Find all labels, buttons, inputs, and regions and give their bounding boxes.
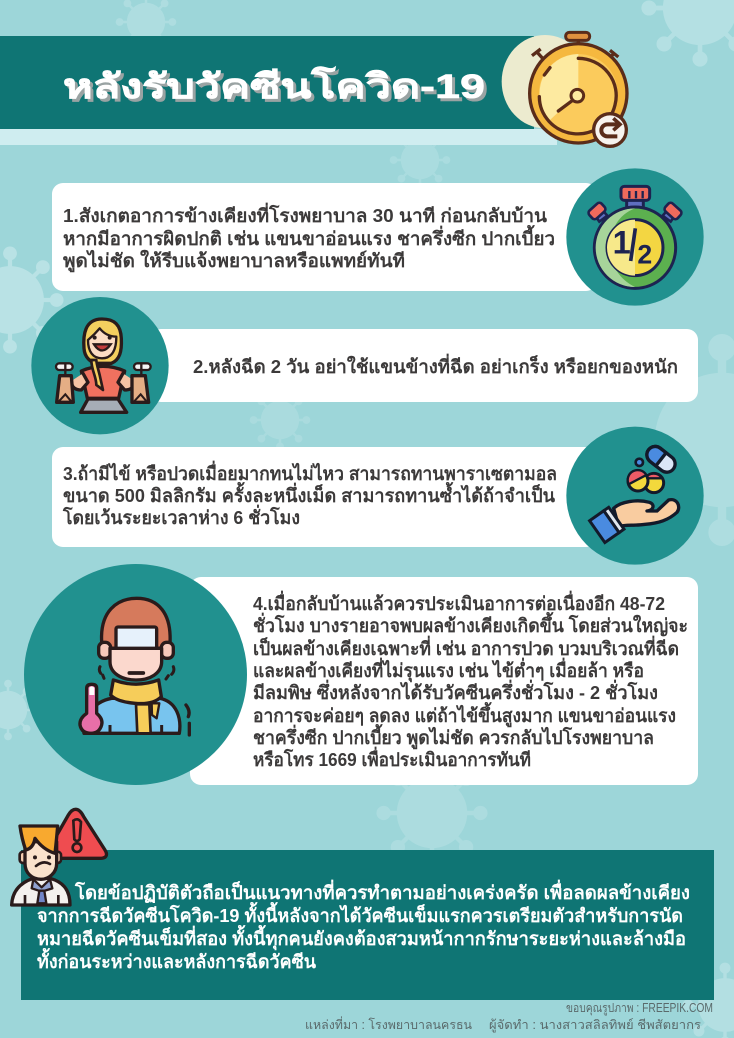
text: closing advice: จากการฉีดวัคซีนโควิด-19 ทั้งนี้หลังจากได้วัคซีนเข็มแรกควรเตรียมตัวสำหรับการนัด — [37, 902, 683, 926]
text: step 4: และผลข้างเคียงที่ไม่รุนแรง เช่น ไข้ต่ำๆ เมื่อยล้า หรือ — [253, 657, 644, 683]
text: step 1: พูดไม่ชัด ให้รีบแจ้งพยาบาลหรือแพทย์ทันที — [63, 249, 405, 273]
icon: feverish person — [24, 564, 247, 785]
icon: warning triangle and worried doctor — [12, 809, 107, 905]
text: closing advice: โดยข้อปฏิบัติตัวถือเป็นแนวทางที่ควรทำตามอย่างเคร่งครัด เพื่อลดผลข้างเคียง — [74, 879, 690, 904]
text: step 4: ชั่วโมง บางรายอาจพบผลข้างเคียงเกิดขึ้น โดยส่วนใหญ่จะ — [253, 612, 688, 637]
panel: closing advice — [21, 850, 714, 1000]
text: one half: 1 — [613, 223, 631, 260]
text: closing advice: หมายฉีดวัคซีนเข็มที่สอง ทั้งนี้ทุกคนยังคงต้องสวมหน้ากากรักษาระยะห่างและล้างมือ — [37, 925, 686, 951]
text: step 2: 2.หลังฉีด 2 วัน อย่าใช้แขนข้างที่ฉีด อย่าเกร็ง หรือยกของหนัก — [193, 353, 678, 377]
panel: step 1 — [52, 183, 597, 291]
icon: stopwatch with refresh badge — [502, 32, 627, 146]
text: step 4: มีลมพิษ ซึ่งหลังจากได้รับวัคซีนครึ่งชั่วโมง - 2 ชั่วโมง — [253, 679, 658, 703]
icon: half-hour timer — [566, 168, 704, 306]
icon: woman carrying bags — [31, 297, 169, 434]
text: step 3 — [62, 460, 557, 528]
text: step 1: หากมีอาการผิดปกติ เช่น แขนขาอ่อนแรง ชาครึ่งซีก ปากเบี้ยว — [63, 225, 555, 249]
text: step 3: ขนาด 500 มิลลิกรัม ครั้งละหนึ่งเม็ด สามารถทานซ้ำได้ถ้าจำเป็น — [63, 482, 555, 506]
text: step 1 — [63, 202, 555, 273]
icon: hand with pills — [566, 427, 704, 565]
credit lines: แหล่งที่มา : โรงพยาบาลนครธน — [305, 1016, 472, 1032]
title: หลังรับวัคซีนโควิด-19 — [63, 66, 485, 106]
text: step 4: 4.เมื่อกลับบ้านแล้วควรประเมินอาการต่อเนื่องอีก 48-72 — [253, 590, 665, 614]
text: step 4: อาการจะค่อยๆ ลดลง แต่ถ้าไข้ขึ้นสูงมาก แขนขาอ่อนแรง — [253, 702, 676, 728]
text: closing advice: ทั้งก่อนระหว่างและหลังการฉีดวัคซีน — [37, 948, 316, 972]
text: step 4: เป็นผลข้างเคียงเฉพาะที่ เช่น อาการปวด บวมบริเวณที่ฉีด — [253, 635, 679, 659]
credit lines — [305, 1001, 713, 1033]
text: closing advice — [37, 879, 690, 972]
title: หลังรับวัคซีนโควิด-19 — [66, 69, 488, 109]
text: one half — [613, 223, 652, 270]
panel: step 2 — [150, 329, 698, 402]
text: step 3: 3.ถ้ามีไข้ หรือปวดเมื่อยมากทนไม่ไหว สามารถทานพาราเซตามอล — [63, 460, 557, 484]
text: one half: 2 — [637, 240, 652, 270]
text: step 4: ชาครึ่งซีก ปากเบี้ยว พูดไม่ชัด ควรกลับไปโรงพยาบาล — [253, 724, 654, 750]
text: step 3: โดยเว้นระยะเวลาห่าง 6 ชั่วโมง — [62, 504, 300, 528]
text: step 1: 1.สังเกตอาการข้างเคียงที่โรงพยาบาล 30 นาที ก่อนกลับบ้าน — [63, 202, 547, 226]
title — [63, 66, 488, 109]
panel: step 3 — [52, 447, 597, 547]
text: step 4 — [253, 590, 688, 770]
text: step 4: หรือโทร 1669 เพื่อประเมินอาการทันที — [253, 746, 531, 770]
panel: step 4 — [190, 577, 698, 785]
credit lines: ผู้จัดทำ : นางสาวสลิลทิพย์ ชีพสัตยากร — [489, 1018, 701, 1033]
title banner — [0, 36, 557, 145]
